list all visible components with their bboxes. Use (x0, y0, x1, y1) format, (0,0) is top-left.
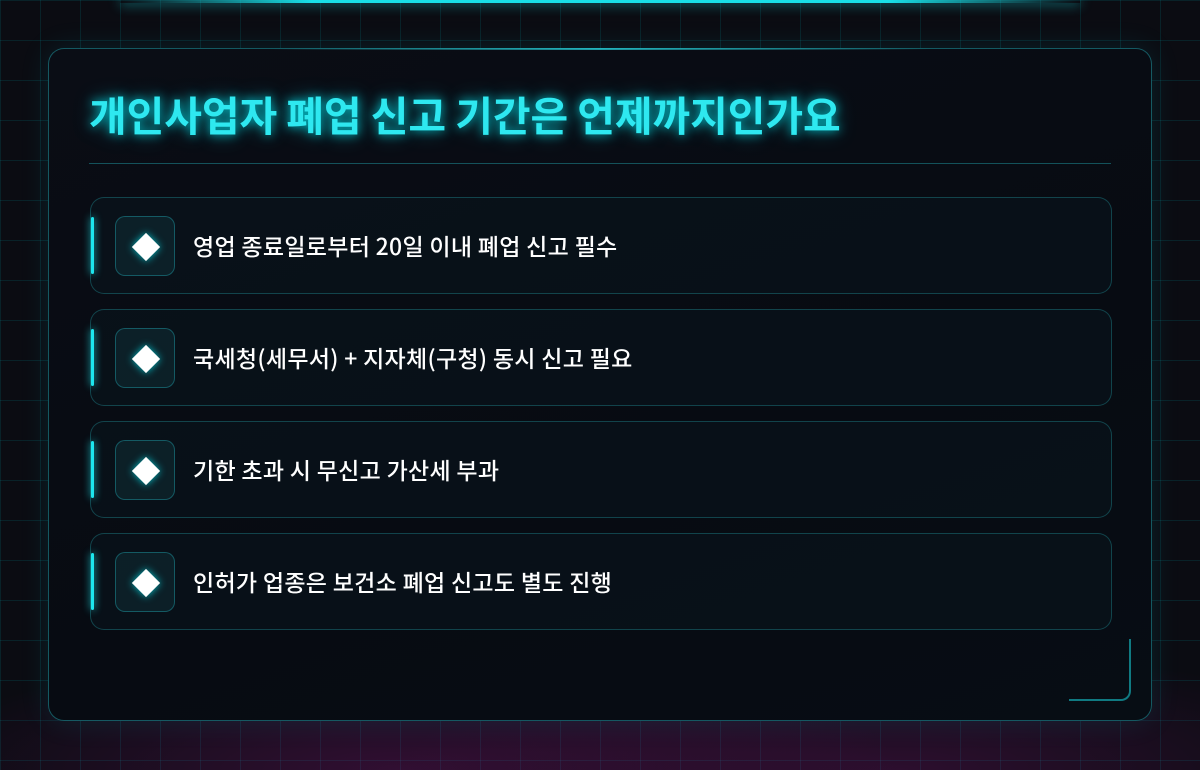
icon: diamond (115, 440, 175, 500)
item 2 (90, 309, 1112, 406)
item 1 (90, 197, 1112, 294)
text 3: 기한 초과 시 무신고 가산세 부과 (193, 452, 499, 486)
text 2: 국세청(세무서) + 지자체(구청) 동시 신고 필요 (193, 340, 633, 374)
text 4: 인허가 업종은 보건소 폐업 신고도 별도 진행 (193, 564, 612, 598)
icon: diamond (115, 328, 175, 388)
item 3 (90, 421, 1112, 518)
icon: diamond (115, 216, 175, 276)
item 4 (90, 533, 1112, 630)
icon: diamond (115, 552, 175, 612)
title: 개인사업자 폐업 신고 기간은 언제까지인가요 (89, 83, 841, 143)
text 1: 영업 종료일로부터 20일 이내 폐업 신고 필수 (193, 228, 618, 262)
corner bracket (1069, 639, 1131, 701)
